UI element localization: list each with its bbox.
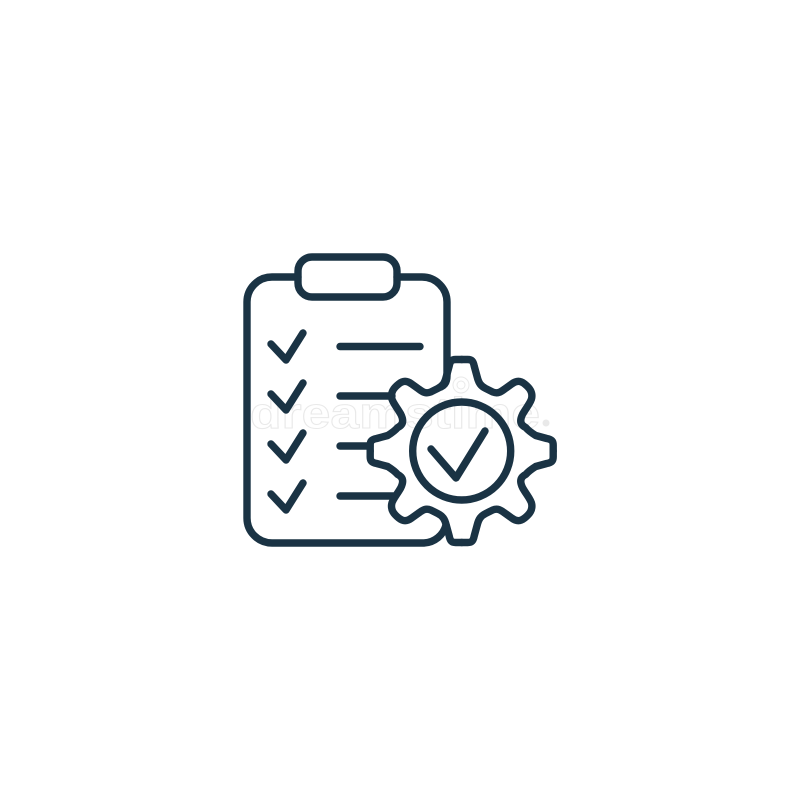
clipboard clip [298,257,397,297]
checklist ticks [271,333,303,510]
gear outline [370,360,553,542]
gear check mark [431,431,485,478]
gear inner circle [413,402,511,500]
watermark [250,377,549,438]
watermark: dreamstime [250,389,540,438]
clipboard body [247,277,447,543]
checklist lines [340,346,420,496]
